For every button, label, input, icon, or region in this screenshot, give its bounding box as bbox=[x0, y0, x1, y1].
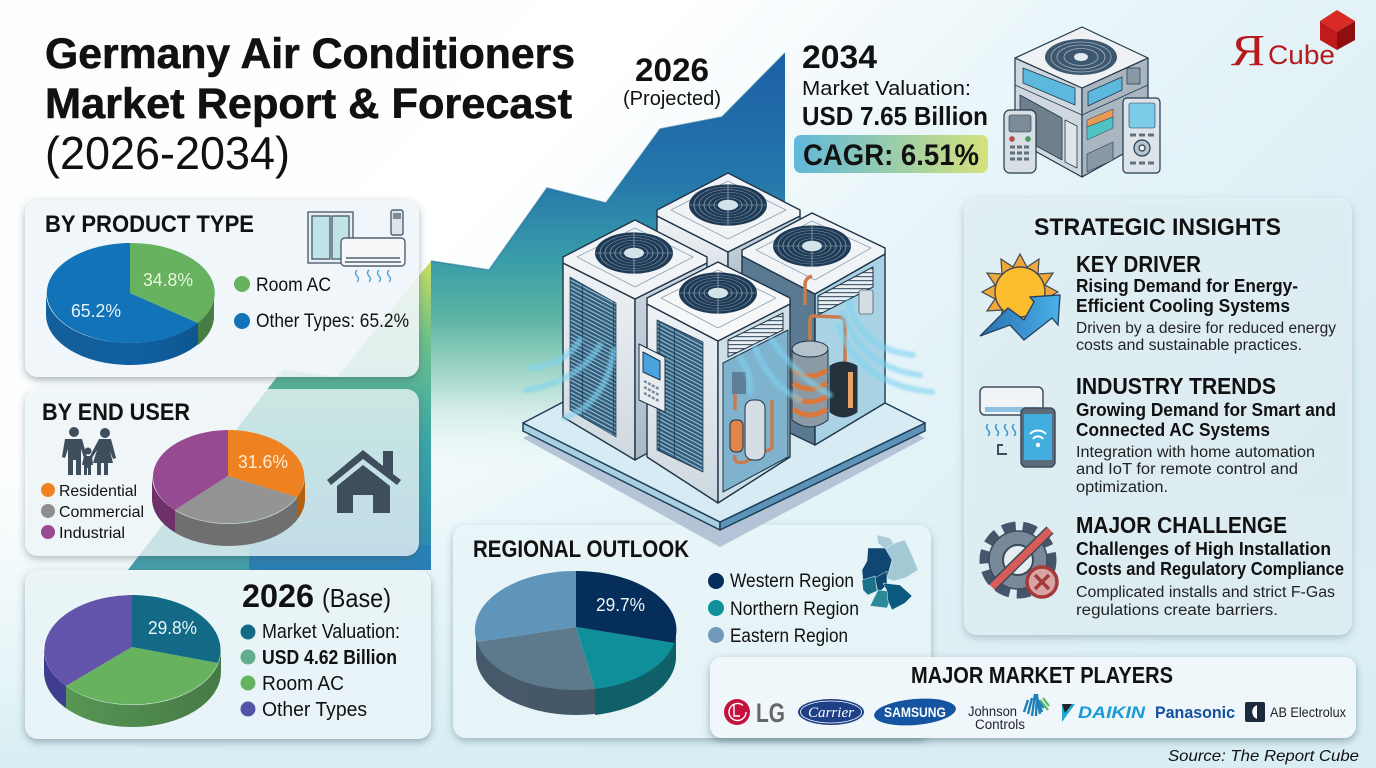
text: key driver bbox=[1076, 251, 1336, 354]
text: industry trends: INDUSTRY TRENDS bbox=[1076, 373, 1276, 399]
logo: LG bbox=[724, 698, 785, 728]
heading: 2026 base: (Base) bbox=[322, 583, 391, 613]
logo: Samsung: SAMSUNG bbox=[884, 704, 946, 720]
text: major challenge: Costs and Regulatory Compliance bbox=[1076, 559, 1344, 579]
legend: product type bbox=[234, 275, 409, 332]
text: major challenge: regulations create barriers. bbox=[1076, 602, 1278, 619]
title: (2026-2034) bbox=[45, 127, 290, 179]
logo: Electrolux bbox=[1245, 702, 1346, 722]
logo: RCube: Cube bbox=[1268, 40, 1335, 70]
illustration: rooftop HVAC units on platform bbox=[523, 173, 932, 547]
logo: RCube bbox=[1231, 10, 1355, 75]
logo: Johnson Controls: Johnson bbox=[968, 704, 1017, 719]
text: industry trends: optimization. bbox=[1076, 479, 1168, 496]
unit: front, open side bbox=[647, 262, 790, 503]
unit: left bbox=[563, 220, 707, 460]
icon: blocked gear bbox=[985, 527, 1057, 597]
heading: REGIONAL OUTLOOK bbox=[473, 536, 690, 563]
source note: Source: The Report Cube bbox=[1168, 748, 1359, 765]
unit: back bbox=[657, 173, 800, 310]
pie chart: 2026 base bbox=[44, 595, 221, 727]
text: industry trends bbox=[1076, 373, 1336, 496]
panel: regional outlook bbox=[453, 525, 931, 738]
panel: strategic insights bbox=[964, 198, 1352, 635]
legend: 2026 base: Other Types bbox=[262, 699, 367, 721]
growth chart area behind illustration bbox=[128, 53, 785, 570]
title bbox=[45, 30, 575, 179]
text: major challenge: Challenges of High Installation bbox=[1076, 539, 1331, 559]
icon: wall controller bbox=[639, 344, 665, 412]
logo: Samsung bbox=[873, 695, 957, 729]
legend: 2026 base bbox=[240, 621, 400, 721]
pie chart: product type bbox=[46, 243, 215, 365]
heading: STRATEGIC INSIGHTS bbox=[1034, 214, 1281, 241]
2026 projected label: 2026 bbox=[635, 52, 709, 88]
panel: 2026 base bbox=[25, 570, 431, 739]
text: major challenge: MAJOR CHALLENGE bbox=[1076, 512, 1287, 538]
logo: Electrolux: AB Electrolux bbox=[1270, 705, 1346, 720]
heading: MAJOR MARKET PLAYERS bbox=[911, 662, 1173, 688]
logo: RCube: Я bbox=[1231, 26, 1265, 75]
legend: 2026 base: Market Valuation: bbox=[262, 621, 400, 643]
heading: BY PRODUCT TYPE bbox=[45, 211, 254, 238]
legend: 2026 base: USD 4.62 Billion bbox=[262, 647, 397, 669]
icon: AC unit with remotes bbox=[1004, 27, 1160, 177]
logo: Carrier: Carrier bbox=[808, 705, 854, 721]
title: Germany Air Conditioners bbox=[45, 30, 575, 78]
pie chart: regional: 29.7% bbox=[596, 595, 645, 615]
legend: end user: Industrial bbox=[59, 525, 125, 542]
2026 projected label bbox=[623, 52, 721, 110]
pie chart: product type: 34.8% bbox=[143, 270, 193, 290]
pie chart: end user: 31.6% bbox=[238, 452, 288, 472]
legend: product type: Other Types: 65.2% bbox=[256, 311, 409, 332]
legend: 2026 base: Room AC bbox=[262, 673, 344, 695]
text: industry trends: Growing Demand for Smart and bbox=[1076, 400, 1336, 420]
legend: end user bbox=[41, 483, 144, 542]
legend: regional: Western Region bbox=[730, 571, 854, 592]
text: key driver: Driven by a desire for reduced energy bbox=[1076, 320, 1336, 337]
internal pipes and tanks bbox=[730, 372, 772, 463]
pie chart: regional bbox=[475, 571, 676, 715]
2026 projected label: (Projected) bbox=[623, 88, 721, 110]
text: major challenge: Complicated installs and strict F-Gas bbox=[1076, 584, 1335, 601]
compressor: coil tank bbox=[792, 341, 828, 427]
logo: Carrier bbox=[798, 699, 864, 725]
text: key driver: Rising Demand for Energy- bbox=[1076, 276, 1298, 296]
legend: regional bbox=[708, 571, 859, 647]
icon: house bbox=[327, 450, 401, 513]
legend: regional: Northern Region bbox=[730, 599, 859, 620]
logo cube bbox=[1320, 10, 1355, 50]
legend: product type: Room AC bbox=[256, 275, 331, 296]
platform bbox=[523, 320, 925, 547]
unit: right, open side bbox=[742, 213, 885, 445]
text: key driver: costs and sustainable practices. bbox=[1076, 337, 1302, 354]
pie chart: 2026 base: 29.8% bbox=[148, 618, 197, 638]
heading: BY END USER bbox=[42, 399, 190, 426]
pie chart: end user bbox=[152, 430, 305, 546]
airflow swirls bbox=[526, 302, 932, 418]
icon: right remote bbox=[1123, 98, 1160, 173]
icon: sun with rising arrow bbox=[980, 254, 1060, 340]
2034 valuation block: USD 7.65 Billion bbox=[802, 101, 988, 131]
legend: regional: Eastern Region bbox=[730, 626, 848, 647]
text: key driver: Efficient Cooling Systems bbox=[1076, 296, 1290, 316]
legend: end user: Commercial bbox=[59, 504, 144, 521]
title: Market Report & Forecast bbox=[45, 80, 572, 128]
map: Germany regions bbox=[862, 535, 918, 610]
compressor: black bbox=[830, 362, 857, 417]
panel: by end user bbox=[25, 389, 419, 556]
panel: major market players bbox=[710, 657, 1356, 738]
icon: smart AC and phone bbox=[980, 387, 1055, 467]
legend: end user: Residential bbox=[59, 483, 137, 500]
text: industry trends: and IoT for remote control and bbox=[1076, 461, 1298, 478]
text: key driver: KEY DRIVER bbox=[1076, 251, 1201, 277]
logo: Johnson Controls: Controls bbox=[975, 717, 1025, 732]
panel: by product type bbox=[25, 200, 419, 377]
logo: Daikin bbox=[1062, 703, 1146, 722]
text: industry trends: Connected AC Systems bbox=[1076, 420, 1270, 440]
text: major challenge bbox=[1076, 512, 1344, 619]
logo: Daikin: DAIKIN bbox=[1078, 703, 1146, 722]
icon: window and wall AC bbox=[308, 210, 405, 282]
text: industry trends: Integration with home automation bbox=[1076, 444, 1315, 461]
logo: LG: LG bbox=[756, 698, 785, 728]
2034 valuation block bbox=[794, 39, 988, 173]
pie chart: product type: 65.2% bbox=[71, 301, 121, 321]
icon: family bbox=[62, 427, 116, 475]
2034 valuation block: Market Valuation: bbox=[802, 78, 971, 100]
CAGR badge: CAGR: 6.51% bbox=[803, 139, 979, 172]
icon: left remote bbox=[1004, 110, 1036, 173]
heading: 2026 base bbox=[242, 578, 391, 614]
logo: Panasonic: Panasonic bbox=[1155, 703, 1235, 722]
logo: Johnson Controls bbox=[968, 694, 1049, 732]
2034 valuation block: 2034 bbox=[802, 39, 877, 75]
heading: 2026 base: 2026 bbox=[242, 578, 314, 614]
